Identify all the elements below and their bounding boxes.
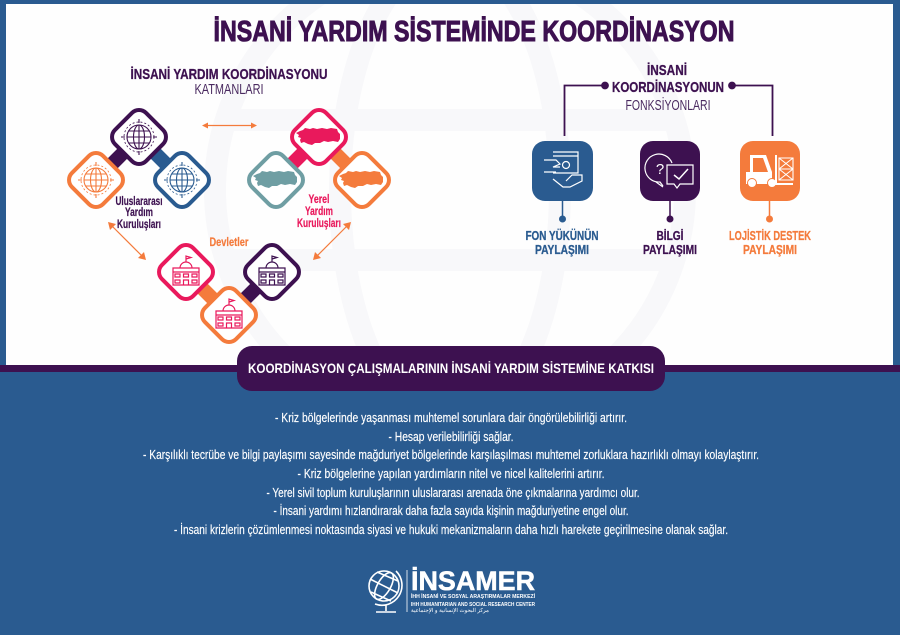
label: local organisations: Yerel (308, 194, 330, 206)
logo (369, 566, 535, 614)
contribution list (143, 411, 759, 537)
bracket connector (564, 82, 772, 136)
icon: Turkey map orange (339, 171, 383, 188)
contribution list: - Karşılıklı tecrübe ve bilgi paylaşımı sayesinde mağduriyet bölgelerinde karşılaşılması muhtemel zorluklara hazırlıklı olmayı kolaylaştırır. (143, 448, 759, 462)
function: funding: FON YÜKÜNÜN (526, 228, 598, 243)
contribution list: - Kriz bölgelerinde yaşanması muhtemel sorunlara dair öngörülebilirliği artırır. (275, 411, 627, 425)
title: İNSANİ YARDIM SİSTEMİNDE KOORDİNASYON (214, 16, 734, 48)
icon: Turkey map teal (253, 171, 297, 188)
label: international organisations: Uluslararası (116, 196, 162, 208)
contribution heading pill (237, 346, 665, 391)
label: local organisations: Yardım (305, 206, 333, 218)
function: information: PAYLAŞIMI (643, 242, 697, 257)
heading: coordination functions: İNSANİ (647, 62, 687, 79)
contribution list: - Hesap verilebilirliği sağlar. (388, 430, 514, 444)
icon: speech bubbles: ? (656, 161, 664, 178)
icon: logo globe (369, 570, 402, 612)
logo: مركز البحوث الإنسانية و الإجتماعية (411, 607, 489, 614)
function: information (640, 141, 700, 257)
function: logistics (729, 141, 811, 257)
label: international organisations (116, 196, 162, 231)
icon: Turkey map pink (296, 128, 340, 145)
heading: coordination functions (612, 62, 724, 114)
icon: money and hand (544, 152, 582, 187)
contribution list: - İnsani krizlerin çözümlenmesi noktasında siyasi ve hukuki mekanizmaların daha hızlı harekete geçirilmesine olanak sağlar. (174, 523, 728, 537)
icon: globe orange (78, 162, 114, 198)
heading: coordination layers (130, 66, 328, 98)
contribution heading pill: KOORDİNASYON ÇALIŞMALARININ İNSANİ YARDIM SİSTEMİNE KATKISI (248, 360, 654, 376)
icon: globe dark (121, 119, 157, 155)
logo: IHH HUMANITARIAN AND SOCIAL RESEARCH CENTER (411, 602, 535, 608)
label: international organisations: Yardım (125, 207, 153, 219)
function: funding: PAYLAŞIMI (535, 242, 589, 257)
heading: coordination layers: KATMANLARI (194, 82, 264, 98)
diagram: local organisations (245, 106, 393, 230)
diagram: international organisations (65, 106, 213, 231)
icon: building dark (259, 256, 285, 285)
icon: building pink lower (216, 299, 242, 328)
heading: coordination layers: İNSANİ YARDIM KOORDİNASYONU (130, 66, 328, 83)
diagram: states (155, 237, 303, 346)
white upper panel (6, 4, 893, 365)
icon: globe blue (164, 162, 200, 198)
contribution list: - Yerel sivil toplum kuruluşlarının uluslararası arenada öne çıkmalarına yardımcı olur. (266, 486, 640, 500)
contribution list: - Kriz bölgelerine yapılan yardımların nitel ve nicel kalitelerini artırır. (298, 467, 604, 481)
function: logistics: LOJİSTİK DESTEK (729, 228, 811, 243)
logo: İHH İNSANİ VE SOSYAL ARAŞTIRMALAR MERKEZİ (411, 593, 535, 600)
function: information: BİLGİ (656, 228, 684, 243)
watermark globe (215, 0, 685, 425)
heading: coordination functions: KOORDİNASYONUN (612, 79, 724, 96)
label: international organisations: Kuruluşları (117, 219, 161, 231)
label: states: Devletler (210, 237, 249, 249)
arrows between layers (108, 122, 351, 260)
heading: coordination functions: FONKSİYONLARI (626, 96, 710, 114)
icon: building pink (173, 256, 199, 285)
label: local organisations (297, 194, 341, 230)
label: local organisations: Kuruluşları (297, 218, 341, 230)
icon: forklift (746, 155, 793, 188)
function: funding (526, 141, 598, 257)
divider band (0, 365, 900, 372)
contribution list: - İnsani yardımı hızlandırarak daha fazla sayıda kişinin mağduriyetine engel olur. (274, 504, 628, 518)
function: logistics: PAYLAŞIMI (743, 242, 797, 257)
logo: İNSAMER (411, 566, 535, 596)
